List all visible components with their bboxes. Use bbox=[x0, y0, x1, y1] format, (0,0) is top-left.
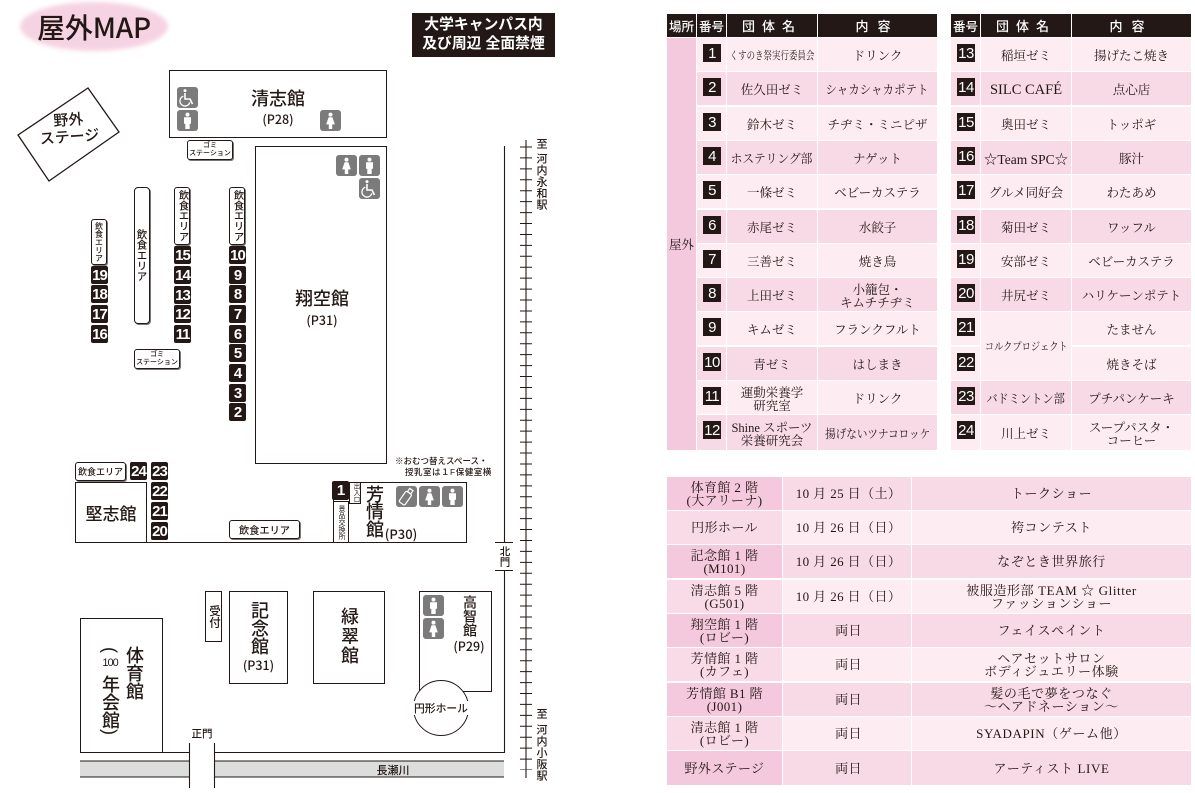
table 1 header: 内容 bbox=[855, 19, 900, 34]
building: 記念館 bbox=[229, 591, 288, 684]
schedule row 7: 芳情館 B1 階 bbox=[686, 686, 763, 700]
schedule row 6: ボディジュエリー体験 bbox=[984, 664, 1119, 678]
reception: 受付 bbox=[208, 605, 220, 628]
row 24 bbox=[951, 415, 1191, 450]
row 19: 安部ゼミ bbox=[1001, 255, 1051, 269]
row 24: コーヒー bbox=[1107, 434, 1156, 448]
schedule row 1 bbox=[667, 477, 1191, 510]
row 6: 6 bbox=[708, 216, 716, 234]
table 2 header: 内容 bbox=[1109, 19, 1154, 34]
row 21 bbox=[951, 312, 1191, 345]
row 23: バドミントン部 bbox=[987, 392, 1065, 406]
schedule row 7: (J001) bbox=[707, 698, 742, 714]
row 7: 7 bbox=[708, 250, 716, 268]
schedule row 1: 体育館 2 階 bbox=[691, 480, 758, 494]
row 2: 佐久田ゼミ bbox=[741, 83, 803, 97]
garbage station lower: ステーション bbox=[136, 359, 178, 366]
row 11 bbox=[697, 381, 937, 414]
schedule row 6: 芳情館 1 階 bbox=[691, 650, 758, 666]
table 1 header bbox=[667, 14, 937, 37]
row 8: 小籠包・ bbox=[852, 282, 902, 296]
row 3: チヂミ・ミニピザ bbox=[827, 118, 928, 132]
row 18 bbox=[951, 210, 1191, 243]
row 14: 点心店 bbox=[1113, 83, 1150, 97]
garbage station top: ゴミ bbox=[203, 142, 217, 148]
row 9: 9 bbox=[708, 318, 716, 336]
row 1 bbox=[697, 38, 937, 71]
row 22: 焼きそば bbox=[1106, 358, 1156, 372]
booths 24-20: 23 bbox=[152, 462, 167, 480]
schedule row 5: 翔空館 1 階 bbox=[691, 616, 758, 632]
row 4: ホステリング部 bbox=[731, 152, 813, 166]
table 1 header: 番号 bbox=[699, 20, 724, 34]
row 19: 19 bbox=[958, 250, 974, 268]
food area column 19-16: 19 bbox=[92, 266, 107, 284]
row 8: 上田ゼミ bbox=[747, 289, 797, 303]
row 6: 水餃子 bbox=[859, 221, 896, 235]
schedule row 7: 両日 bbox=[835, 692, 862, 707]
schedule row 2: 円形ホール bbox=[691, 520, 758, 535]
food area column 10-2: 9 bbox=[234, 266, 241, 284]
building: 緑翠館 bbox=[313, 591, 385, 684]
food area column 19-16 bbox=[91, 219, 108, 343]
outdoor stage: 野外 bbox=[53, 111, 84, 130]
building: 清志館: (P28) bbox=[262, 108, 294, 128]
row 10: はしまき bbox=[852, 358, 902, 372]
schedule row 1: 10 月 25 日（土） bbox=[796, 486, 901, 501]
row 13 bbox=[951, 38, 1191, 71]
merged group cell bbox=[981, 312, 1071, 380]
table 1 header: 場所 bbox=[669, 20, 694, 34]
row 8: キムチチヂミ bbox=[840, 296, 915, 310]
schedule row 4: (G501) bbox=[705, 596, 744, 610]
schedule row 3: (M101) bbox=[703, 560, 746, 576]
schedule row 9: 両日 bbox=[835, 760, 862, 776]
row 23: 23 bbox=[958, 388, 974, 404]
row 14: 14 bbox=[958, 78, 974, 96]
food area pill, centre long bbox=[134, 187, 150, 324]
row 23: プチパンケーキ bbox=[1088, 392, 1175, 406]
schedule row 3: 記念館 1 階 bbox=[691, 548, 758, 562]
schedule row 8: 清志館 1 階 bbox=[691, 720, 758, 734]
food area column 15-11: 13 bbox=[175, 286, 190, 304]
row 20 bbox=[951, 278, 1191, 311]
row 11: 研究室 bbox=[753, 398, 791, 412]
schedule row 3 bbox=[667, 545, 1191, 578]
row 20: ハリケーンポテト bbox=[1082, 289, 1181, 303]
building: 高智館: (P29) bbox=[453, 636, 485, 654]
reception bbox=[205, 591, 222, 642]
schedule row 2: 袴コンテスト bbox=[1011, 520, 1092, 535]
nursing room note: ※おむつ替えスペース・ bbox=[395, 456, 487, 466]
building: 翔空館: (P31) bbox=[306, 310, 338, 328]
row 1: 1 bbox=[708, 44, 716, 62]
food area column 10-2: 6 bbox=[234, 326, 241, 342]
row 21: 21 bbox=[958, 318, 974, 336]
schedule row 8: SYADAPIN（ゲーム他） bbox=[976, 726, 1127, 741]
row 13: 揚げたこ焼き bbox=[1094, 49, 1169, 63]
schedule row 5: 両日 bbox=[835, 623, 862, 638]
building: 堅志館: 堅志館 bbox=[86, 505, 136, 524]
table 2 header bbox=[951, 14, 1191, 37]
schedule row 9: 野外ステージ bbox=[685, 760, 764, 776]
row 2: 2 bbox=[708, 78, 716, 96]
garbage station top bbox=[187, 140, 233, 160]
building: 芳情館 bbox=[333, 482, 467, 543]
food area pill: corridor bbox=[229, 520, 300, 539]
building: 記念館: (P31) bbox=[243, 654, 274, 674]
food area column 15-11: 11 bbox=[176, 326, 189, 342]
booths 24-20: 20 bbox=[152, 522, 167, 540]
schedule row 8: (ロビー) bbox=[700, 732, 749, 748]
row 7: 焼き鳥 bbox=[859, 255, 896, 269]
row 16: 豚汁 bbox=[1119, 152, 1144, 166]
station label bottom: 至 bbox=[535, 708, 547, 719]
building: 体育館: 体育館 bbox=[124, 646, 144, 700]
row 1: ドリンク bbox=[853, 49, 902, 63]
row 24: スープパスタ・ bbox=[1089, 420, 1174, 434]
schedule row 8: 両日 bbox=[835, 726, 862, 741]
row 15: 奥田ゼミ bbox=[1001, 118, 1051, 132]
food area column 10-2: 2 bbox=[234, 404, 241, 420]
building: 堅志館 bbox=[75, 482, 147, 543]
row 1: くすのき祭実行委員会 bbox=[730, 50, 814, 62]
entrance label bbox=[349, 482, 361, 504]
garbage station top: ステーション bbox=[189, 150, 231, 157]
food area column 10-2: 3 bbox=[234, 384, 241, 402]
food area column 15-11: 14 bbox=[175, 266, 190, 284]
no smoking notice: 大学キャンパス内 bbox=[424, 17, 543, 33]
nursing room note: 授乳室は１F保健室横 bbox=[405, 467, 492, 477]
food area column 19-16: 17 bbox=[92, 306, 107, 322]
row 3: 3 bbox=[708, 114, 716, 130]
row 20: 20 bbox=[958, 284, 974, 302]
schedule row 4 bbox=[667, 580, 1191, 613]
schedule row 6: (カフェ) bbox=[700, 664, 749, 678]
connector corridor line bbox=[147, 542, 337, 543]
schedule row 6 bbox=[667, 648, 1191, 681]
food area column 10-2: 8 bbox=[234, 286, 241, 302]
location column bbox=[667, 38, 696, 450]
row 10 bbox=[697, 347, 937, 380]
food area column 19-16: 16 bbox=[92, 326, 107, 342]
row 18: ワッフル bbox=[1107, 221, 1156, 235]
outdoor stage: ステージ bbox=[39, 127, 100, 148]
row 23 bbox=[951, 381, 1191, 414]
building: 芳情館: (P30) bbox=[385, 524, 417, 542]
garbage station lower: ゴミ bbox=[150, 350, 164, 358]
building: 翔空館 bbox=[255, 146, 387, 464]
row 14: SILC CAFÉ bbox=[990, 82, 1062, 98]
booths 24-20: 24 bbox=[131, 462, 146, 480]
row 9 bbox=[697, 312, 937, 345]
row 17: グルメ同好会 bbox=[989, 186, 1063, 200]
booths 24-20 bbox=[130, 462, 168, 540]
schedule row 9 bbox=[667, 751, 1191, 785]
schedule row 9: アーティスト LIVE bbox=[993, 760, 1110, 776]
food area column 10-2 bbox=[229, 187, 246, 421]
station label bottom: 河内小阪駅 bbox=[535, 724, 547, 781]
garbage station lower bbox=[134, 349, 180, 369]
building: 緑翠館: 緑翠館 bbox=[339, 607, 359, 665]
row 19: ベビーカステラ bbox=[1088, 255, 1175, 269]
title: 屋外MAP bbox=[37, 7, 151, 47]
row 19 bbox=[951, 244, 1191, 277]
building: 翔空館: 翔空館 bbox=[295, 289, 349, 309]
building: 記念館: 記念館 bbox=[249, 601, 269, 655]
north gate label: 北門 bbox=[498, 546, 510, 567]
schedule row 7: 髪の毛で夢をつなぐ bbox=[990, 686, 1113, 700]
schedule row 5: (ロビー) bbox=[700, 630, 749, 644]
food area column 15-11 bbox=[174, 187, 191, 343]
entrance label: 出入口 bbox=[352, 483, 359, 503]
schedule row 6: ヘアセットサロン bbox=[997, 650, 1106, 666]
row 18: 菊田ゼミ bbox=[1001, 221, 1051, 235]
schedule row 3: 10 月 26 日（日） bbox=[796, 554, 901, 569]
row 21: たません bbox=[1106, 323, 1156, 337]
row 3 bbox=[697, 107, 937, 140]
no smoking notice bbox=[412, 13, 555, 57]
building: 体育館 bbox=[80, 618, 163, 753]
merged group cell: コルクプロジェクト bbox=[985, 341, 1067, 353]
row 13: 稲垣ゼミ bbox=[1001, 49, 1051, 63]
row 17 bbox=[951, 175, 1191, 208]
schedule row 7 bbox=[667, 683, 1191, 716]
row 7: 三善ゼミ bbox=[747, 255, 797, 269]
building: 清志館: 清志館 bbox=[251, 89, 305, 109]
food area pill: 堅志館 bbox=[75, 462, 126, 481]
booths 24-20: 21 bbox=[152, 502, 167, 520]
row 4: 4 bbox=[708, 148, 716, 164]
food area pill: corridor: 飲食エリア bbox=[239, 526, 290, 537]
river label: 長瀬川 bbox=[376, 764, 410, 776]
row 8 bbox=[697, 278, 937, 311]
schedule row 6: 両日 bbox=[835, 657, 862, 672]
row 10: 10 bbox=[704, 354, 720, 370]
row 11: ドリンク bbox=[853, 392, 902, 406]
row 16 bbox=[951, 141, 1191, 174]
row 15 bbox=[951, 107, 1191, 140]
row 22 bbox=[951, 347, 1191, 380]
row 11: 11 bbox=[705, 388, 719, 404]
row 24: 24 bbox=[958, 422, 974, 438]
row 13: 13 bbox=[958, 44, 974, 62]
food area column 15-11: 15 bbox=[175, 246, 190, 264]
row 12: Shine スポーツ bbox=[731, 420, 813, 434]
booths 24-20: 22 bbox=[152, 482, 167, 500]
row 18: 18 bbox=[958, 216, 974, 234]
row 4 bbox=[697, 141, 937, 174]
schedule row 5 bbox=[667, 614, 1191, 647]
food area column 15-11: 飲食エリア bbox=[176, 190, 188, 242]
food area column 15-11: 12 bbox=[175, 306, 190, 322]
food area column 10-2: 4 bbox=[234, 364, 241, 382]
row 5: 5 bbox=[708, 182, 716, 198]
building: 体育館: 100 bbox=[102, 657, 118, 669]
row 4: ナゲット bbox=[853, 152, 902, 166]
food area column 19-16: 飲食エリア bbox=[94, 222, 104, 262]
building: 体育館: 年会館 bbox=[100, 675, 120, 729]
booth 1 bbox=[332, 481, 349, 500]
schedule row 2: 10 月 26 日（日） bbox=[796, 520, 901, 535]
circular hall bbox=[413, 680, 469, 736]
station label top: 河内永和駅 bbox=[535, 153, 547, 210]
row 3: 鈴木ゼミ bbox=[747, 118, 797, 132]
station label top: 至 bbox=[535, 138, 547, 149]
prize exchange label: 景品交換所 bbox=[338, 504, 345, 540]
row 2 bbox=[697, 72, 937, 105]
row 5: ベビーカステラ bbox=[834, 186, 921, 200]
table 2 header: 団体名 bbox=[996, 19, 1056, 34]
row 17: わたあめ bbox=[1106, 186, 1156, 200]
schedule row 4: 10 月 26 日（日） bbox=[796, 589, 901, 604]
row 2: シャカシャカポテト bbox=[826, 83, 929, 97]
row 8: 8 bbox=[708, 284, 716, 302]
circular hall: 円形ホール bbox=[414, 703, 468, 715]
row 12: 12 bbox=[704, 422, 720, 438]
row 5: 一條ゼミ bbox=[747, 186, 797, 200]
building: 芳情館: 情 bbox=[366, 502, 384, 522]
table 2 header: 番号 bbox=[953, 20, 978, 34]
schedule row 4: ファッションショー bbox=[991, 596, 1112, 610]
schedule row 8 bbox=[667, 717, 1191, 750]
row 20: 井尻ゼミ bbox=[1001, 289, 1051, 303]
row 16: ☆Team SPC☆ bbox=[984, 152, 1068, 167]
food area pill: 堅志館: 飲食エリア bbox=[78, 467, 123, 477]
food area column 10-2: 5 bbox=[234, 344, 241, 362]
row 10: 青ゼミ bbox=[753, 358, 791, 372]
table 1 header: 団体名 bbox=[742, 19, 802, 34]
row 17: 17 bbox=[958, 182, 974, 198]
row 12: 揚げないツナコロッケ bbox=[825, 427, 930, 441]
row 12: 栄養研究会 bbox=[741, 434, 803, 448]
building: 清志館 bbox=[169, 70, 387, 138]
row 12 bbox=[697, 415, 937, 450]
food area pill, centre long: 飲食エリア bbox=[136, 229, 148, 282]
row 9: フランクフルト bbox=[834, 323, 921, 337]
food area column 10-2: 飲食エリア bbox=[232, 190, 242, 242]
building: 体育館: ( ) bbox=[100, 647, 120, 735]
row 14 bbox=[951, 72, 1191, 105]
food area column 19-16: 18 bbox=[92, 286, 107, 302]
location column: 屋外 bbox=[669, 238, 694, 252]
row 16: 16 bbox=[958, 148, 974, 164]
schedule row 3: なぞとき世界旅行 bbox=[997, 554, 1106, 569]
schedule row 4: 清志館 5 階 bbox=[691, 582, 758, 598]
building: 芳情館: 芳 bbox=[366, 485, 384, 505]
row 15: 15 bbox=[958, 114, 974, 130]
title bbox=[18, 0, 170, 53]
schedule row 5: フェイスペイント bbox=[997, 623, 1106, 638]
outdoor stage bbox=[17, 87, 120, 182]
main gate label: 正門 bbox=[192, 728, 212, 740]
row 24: 川上ゼミ bbox=[1001, 427, 1051, 441]
schedule row 2 bbox=[667, 511, 1191, 544]
schedule row 1: (大アリーナ) bbox=[687, 492, 762, 508]
nursing room note bbox=[395, 456, 492, 477]
building: 芳情館: 館 bbox=[366, 520, 384, 540]
row 9: キムゼミ bbox=[747, 323, 797, 337]
building: 高智館: 高智館 bbox=[462, 595, 478, 637]
row 6 bbox=[697, 210, 937, 243]
row 5 bbox=[697, 175, 937, 208]
food area column 10-2: 7 bbox=[234, 306, 241, 322]
row 7 bbox=[697, 244, 937, 277]
no smoking notice: 及び周辺 全面禁煙 bbox=[422, 36, 545, 52]
building: 高智館 bbox=[419, 591, 492, 692]
row 15: トッポギ bbox=[1107, 118, 1156, 132]
row 6: 赤尾ゼミ bbox=[747, 221, 797, 235]
schedule row 4: 被服造形部 TEAM ☆ Glitter bbox=[966, 582, 1137, 598]
row 22: 22 bbox=[958, 354, 974, 370]
schedule row 1: トークショー bbox=[1011, 486, 1092, 501]
schedule row 7: 〜ヘアドネーション〜 bbox=[984, 698, 1119, 714]
booth 1: 1 bbox=[337, 482, 344, 499]
row 11: 運動栄養学 bbox=[741, 386, 803, 400]
food area column 10-2: 10 bbox=[230, 246, 245, 264]
prize exchange label bbox=[333, 501, 349, 543]
